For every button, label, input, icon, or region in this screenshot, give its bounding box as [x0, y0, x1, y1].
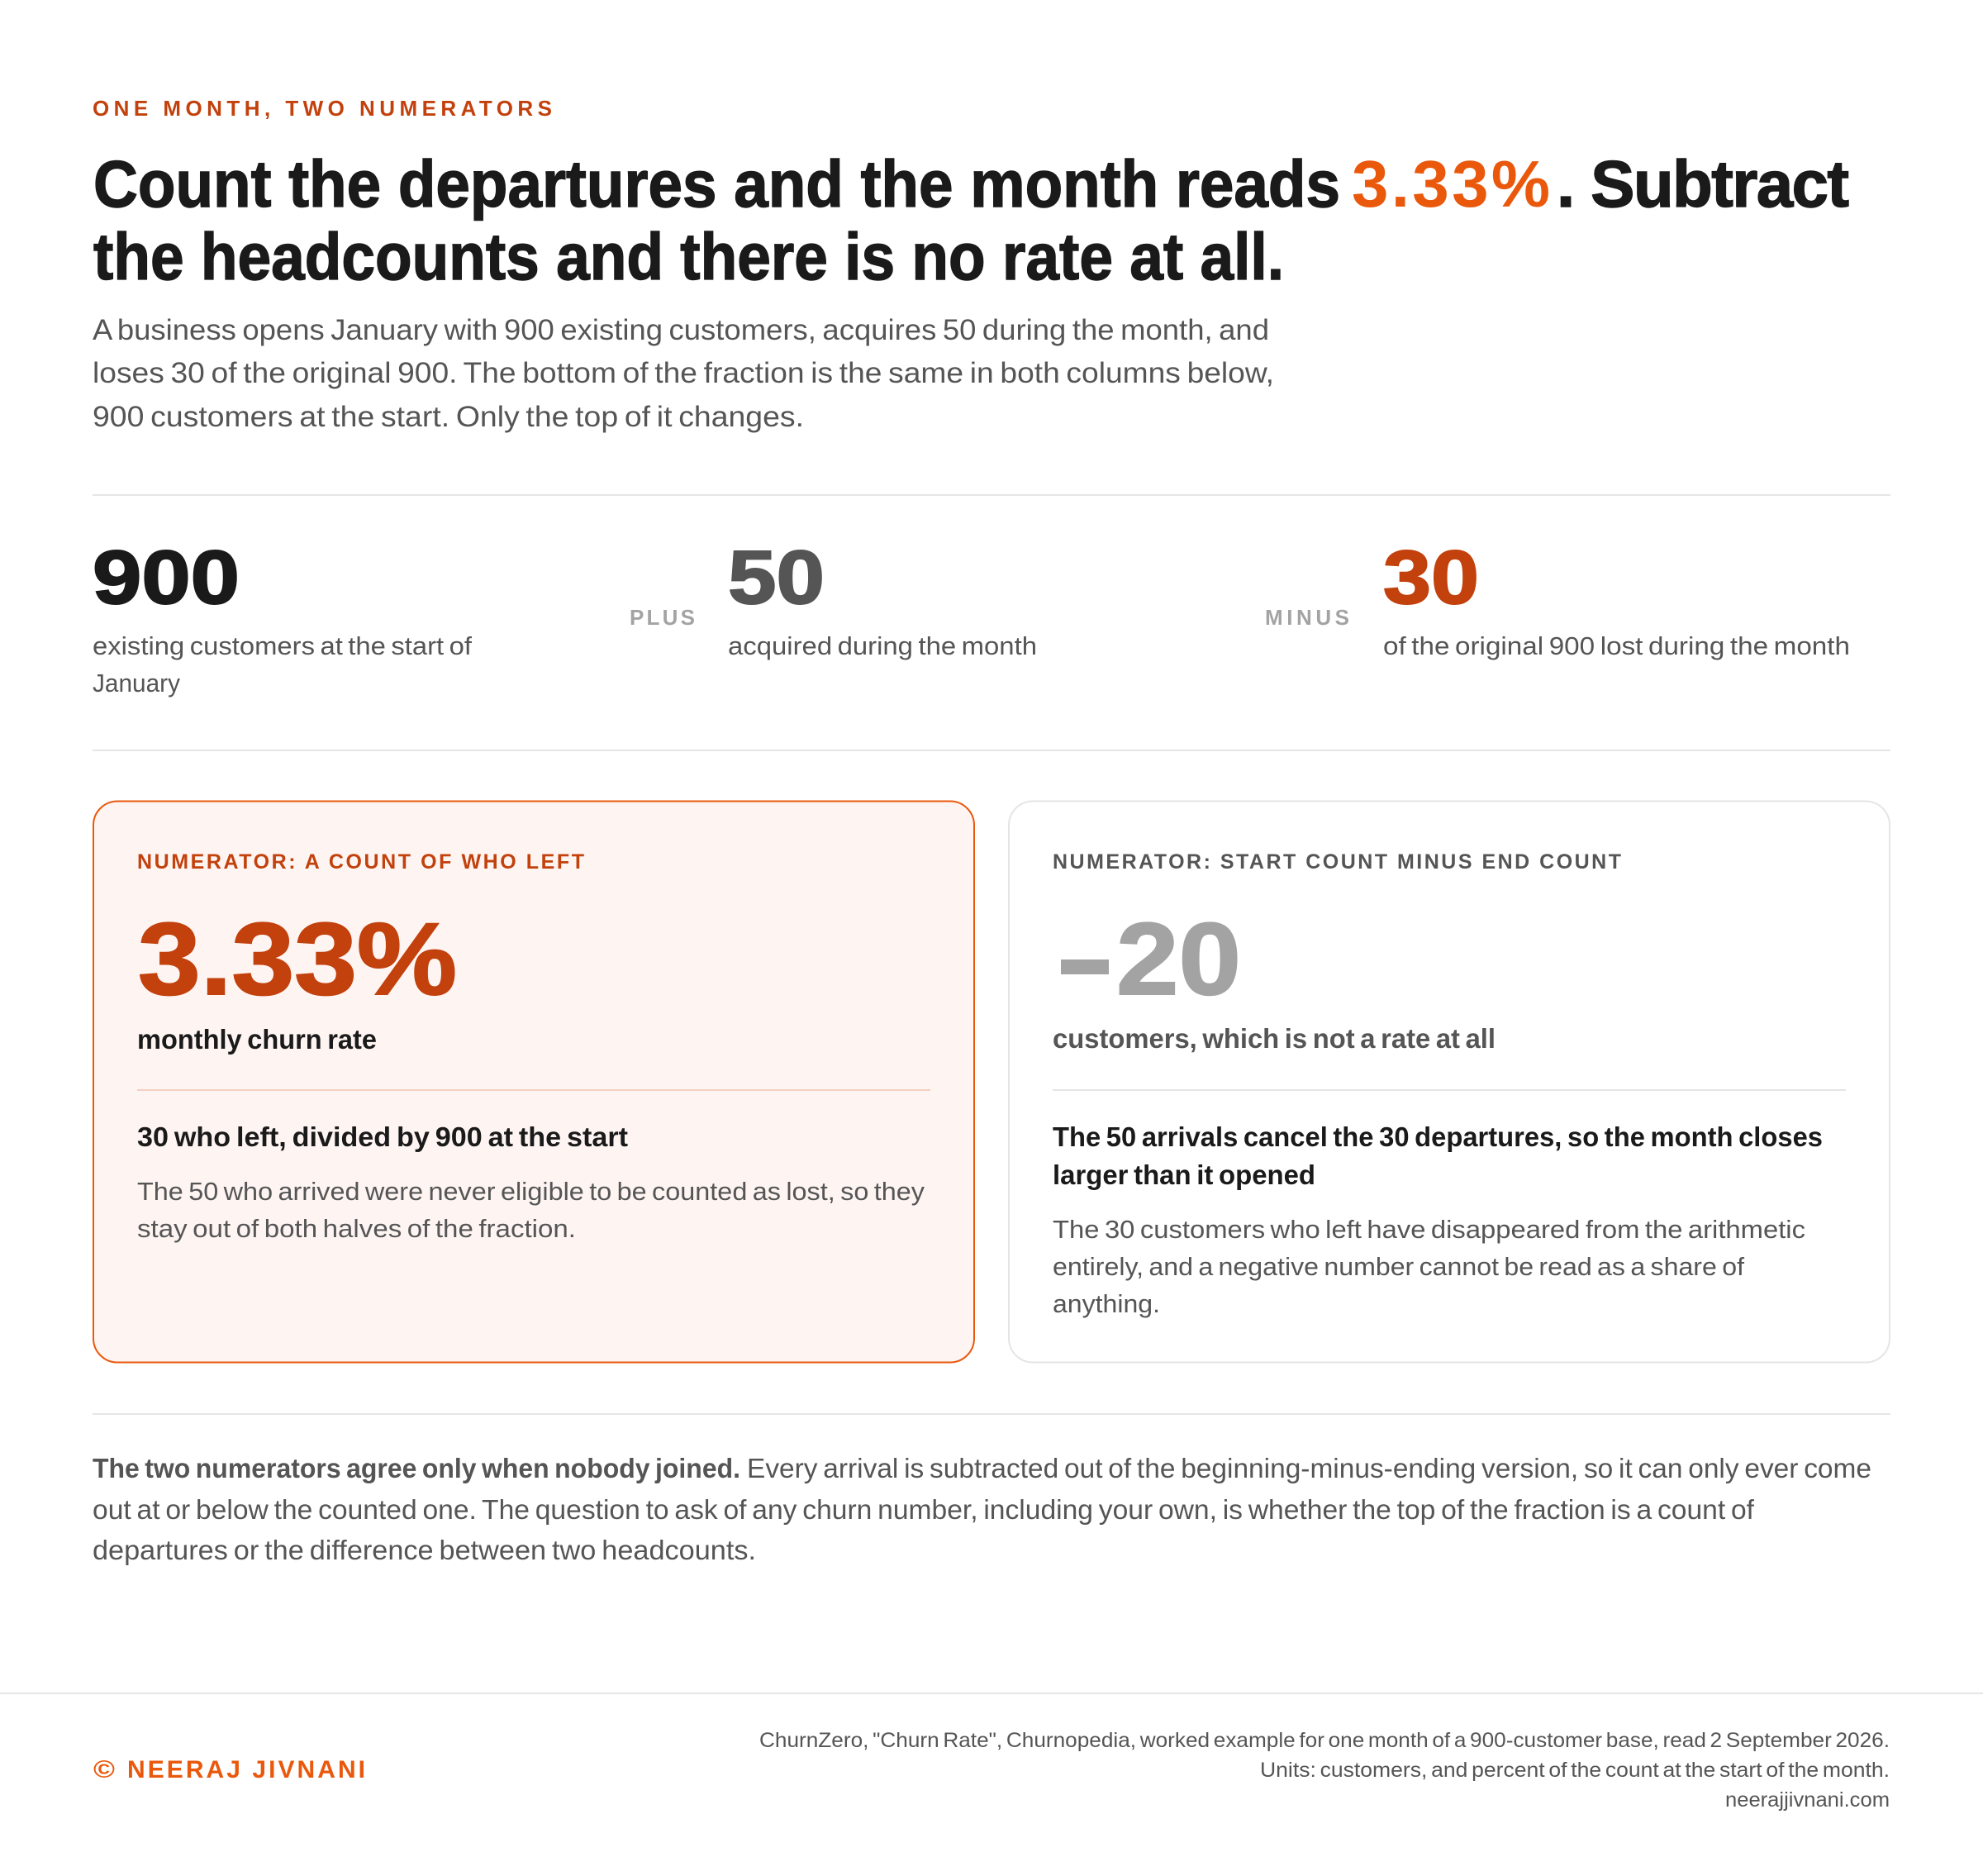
explanation heading: 30 who left, divided by 900 at the start: [137, 1121, 628, 1152]
explanation body: [137, 1177, 925, 1243]
explanation heading: [1053, 1121, 1823, 1190]
explanation body: [1053, 1215, 1805, 1318]
title: . Subtract: [1557, 147, 1849, 221]
explanation body: The 50 who arrived were never eligible to be counted as lost, so they: [137, 1177, 925, 1206]
footer source notes: neerajjivnani.com: [1725, 1788, 1890, 1812]
closing paragraph: out at or below the counted one. The question to ask of any churn number, including your own, is whether the top of the fraction is a count of: [93, 1494, 1755, 1525]
stat: 900 existing customers: 900: [93, 536, 240, 620]
big number: −20: [1061, 902, 1241, 1017]
stat: 900 existing customers: existing customers at the start of: [93, 631, 472, 660]
eyebrow: ONE MONTH, TWO NUMERATORS: [93, 96, 552, 121]
operator: minus: MINUS: [1265, 605, 1349, 630]
footer brand: ©: [93, 1756, 115, 1783]
footer source notes: [759, 1729, 1890, 1812]
panel: count of who left: [93, 802, 974, 1362]
closing paragraph: The two numerators agree only when nobody joined.: [93, 1453, 740, 1483]
stat: 900 existing customers: [93, 536, 472, 698]
title: [93, 147, 1849, 293]
intro paragraph: 900 customers at the start. Only the top of it changes.: [93, 401, 804, 433]
explanation heading: The 50 arrivals cancel the 30 departures, so the month closes: [1053, 1121, 1823, 1152]
title: the headcounts and there is no rate at all.: [93, 220, 1284, 293]
closing paragraph: [93, 1453, 1871, 1565]
closing paragraph: departures or the difference between two headcounts.: [93, 1535, 756, 1565]
number caption: monthly churn rate: [137, 1024, 377, 1055]
title highlight: 3.33%: 3.33%: [1352, 147, 1550, 221]
panel: start count minus end count: [1009, 802, 1890, 1362]
footer source notes: Units: customers, and percent of the count at the start of the month.: [1260, 1759, 1890, 1782]
big number: 3.33%: 3.33%: [138, 902, 457, 1017]
stat: 30 lost: of the original 900 lost during the month: [1383, 631, 1850, 660]
operator: plus: PLUS: [630, 605, 695, 630]
stat: 50 acquired: [728, 536, 1037, 660]
big number: −20: 20: [1116, 902, 1241, 1017]
stat: 30 lost: [1383, 536, 1850, 660]
stat: 50 acquired: acquired during the month: [728, 631, 1037, 660]
explanation body: stay out of both halves of the fraction.: [137, 1214, 576, 1243]
footer brand: NEERAJ JIVNANI: [127, 1756, 365, 1783]
explanation body: anything.: [1053, 1289, 1160, 1318]
panel label: NUMERATOR: START COUNT MINUS END COUNT: [1053, 850, 1621, 874]
stat: 900 existing customers: January: [93, 669, 180, 698]
explanation heading: larger than it opened: [1053, 1159, 1315, 1190]
explanation body: entirely, and a negative number cannot be read as a share of: [1053, 1252, 1744, 1281]
closing paragraph: Every arrival is subtracted out of the beginning-minus-ending version, so it can only ever come: [747, 1453, 1871, 1483]
intro paragraph: [93, 314, 1274, 433]
footer source notes: ChurnZero, "Churn Rate", Churnopedia, worked example for one month of a 900-customer base, read 2 September 2026.: [759, 1729, 1890, 1752]
intro paragraph: loses 30 of the original 900. The bottom of the fraction is the same in both columns below,: [93, 357, 1274, 389]
panel label: NUMERATOR: A COUNT OF WHO LEFT: [137, 850, 584, 874]
intro paragraph: A business opens January with 900 existing customers, acquires 50 during the month, and: [93, 314, 1269, 346]
number caption: customers, which is not a rate at all: [1053, 1023, 1496, 1054]
title: Count the departures and the month reads: [93, 147, 1340, 221]
stat: 50 acquired: 50: [728, 536, 825, 620]
explanation body: The 30 customers who left have disappeared from the arithmetic: [1053, 1215, 1805, 1244]
stat: 30 lost: 30: [1383, 536, 1479, 620]
